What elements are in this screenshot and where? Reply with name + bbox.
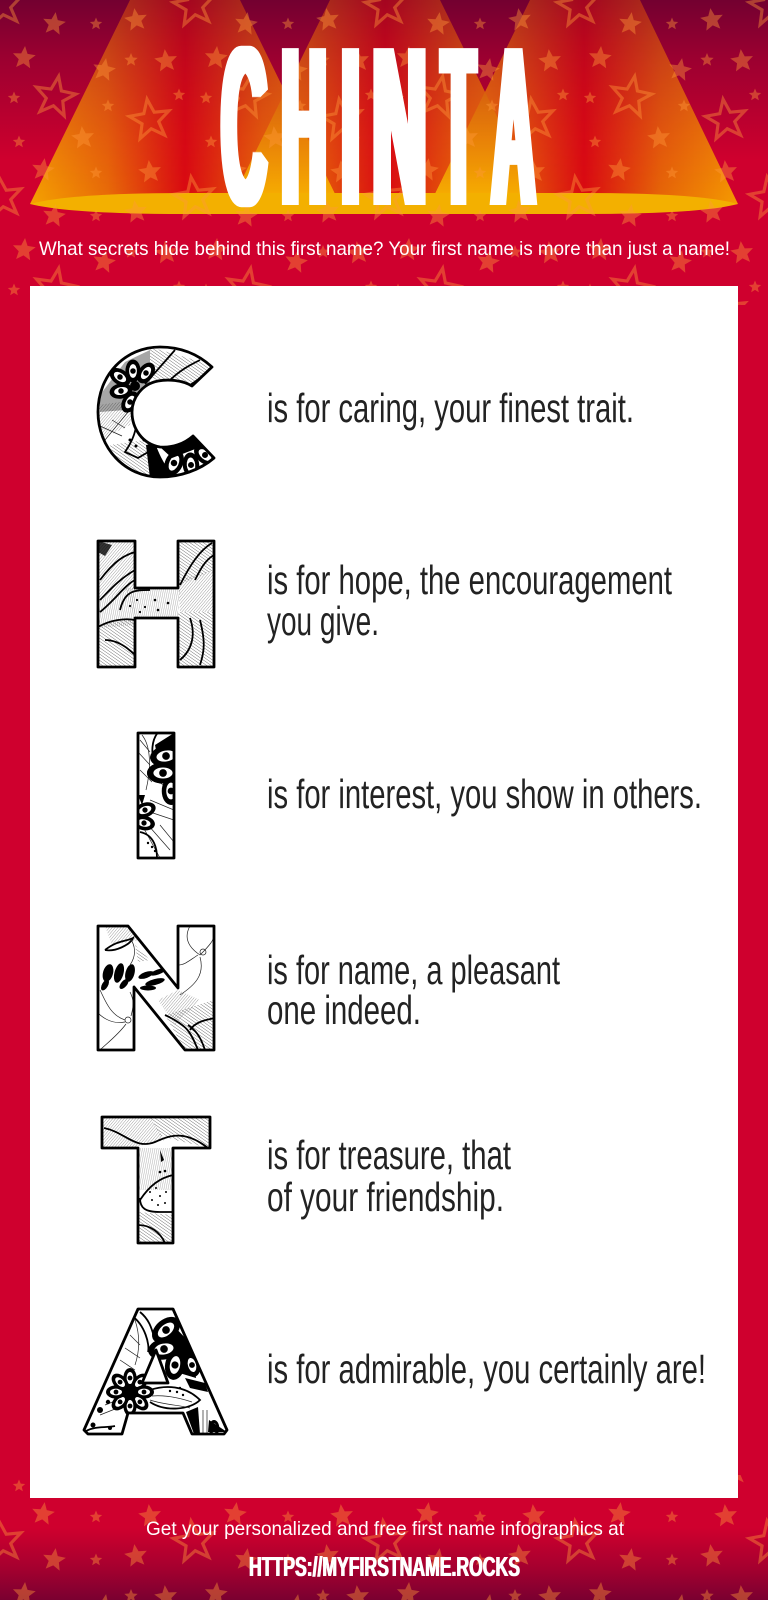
icon: zentangle letter C	[98, 347, 220, 479]
title: A	[492, 0, 535, 254]
row: letter A	[84, 1309, 706, 1436]
icon: zentangle letter N	[98, 926, 215, 1050]
title: I	[342, 0, 359, 254]
icon: zentangle letter A	[84, 1309, 227, 1436]
spotlight overlap: left	[244, 100, 334, 193]
spotlight overlap: right	[436, 93, 520, 193]
title: C	[222, 0, 266, 254]
row: letter T	[102, 1117, 511, 1243]
icon: zentangle letter T	[102, 1117, 210, 1243]
text: N lines: one indeed.	[267, 987, 421, 1033]
title: N	[372, 0, 427, 253]
text: C line: is for caring, your finest trait.	[267, 385, 634, 431]
text: H lines	[267, 557, 672, 644]
text: T lines: of your friendship.	[267, 1174, 504, 1220]
text: N lines	[267, 947, 560, 1033]
row: letter N	[98, 926, 560, 1050]
icon: zentangle letter H	[98, 541, 214, 667]
title: H	[282, 0, 326, 254]
text: T lines	[267, 1132, 511, 1220]
text: H lines: you give.	[267, 598, 379, 644]
spotlight: left cone	[30, 0, 282, 204]
title: T	[442, 0, 475, 255]
text: T lines: is for treasure, that	[267, 1132, 511, 1178]
footer URL: HTTPS://MYFIRSTNAME.ROCKS	[249, 1551, 520, 1582]
spotlights	[30, 0, 738, 204]
title	[222, 0, 535, 255]
row: letter I	[132, 730, 702, 858]
icon: zentangle letter I	[136, 732, 176, 860]
text: N lines: is for name, a pleasant	[267, 947, 560, 993]
spotlight: middle cone	[244, 0, 485, 193]
footer tagline: Get your personalized and free first name infographics at	[146, 1518, 625, 1540]
spotlight floor glow	[30, 193, 738, 214]
spotlight: right cone	[430, 0, 738, 204]
row: letter C	[98, 347, 634, 479]
row: letter H	[98, 541, 672, 667]
white content panel	[30, 286, 738, 1498]
subtitle: What secrets hide behind this first name? Your first name is more than just a name!	[39, 238, 730, 260]
